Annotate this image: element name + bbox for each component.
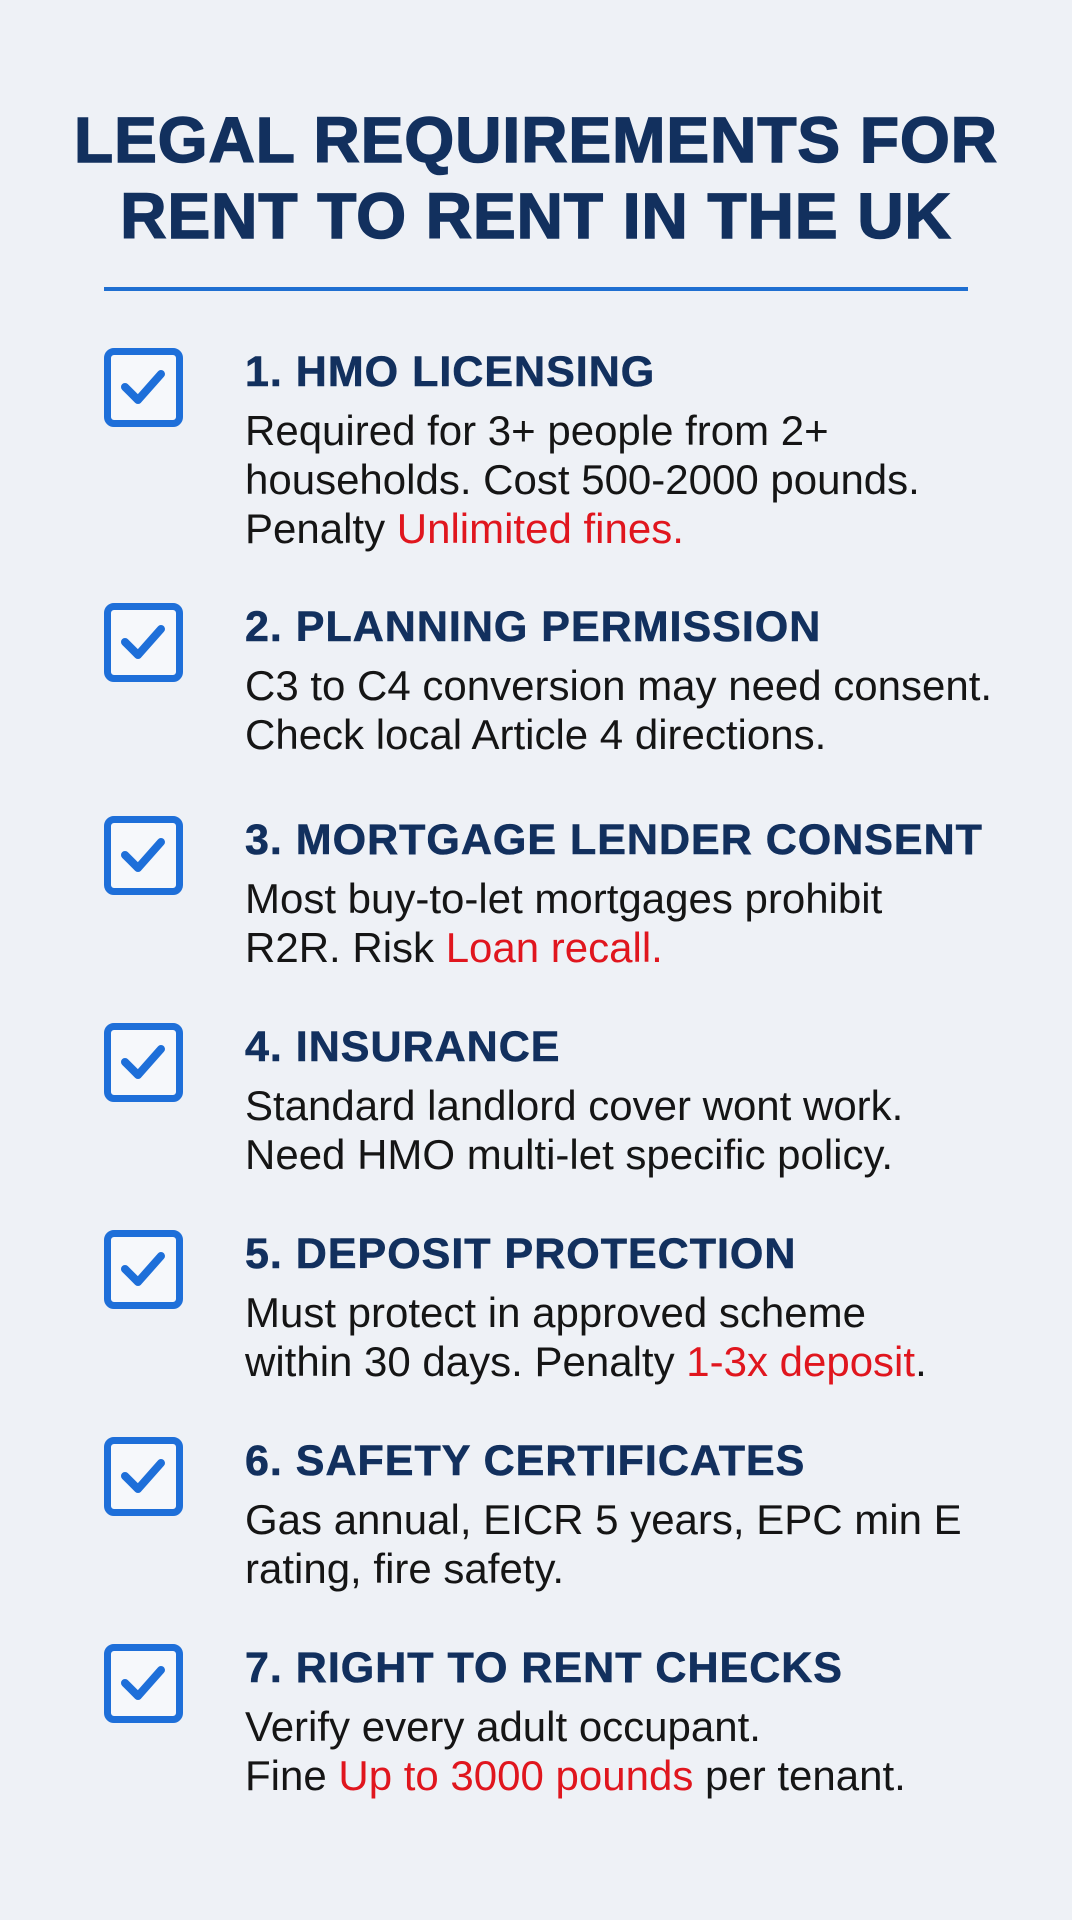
body text: C3 to C4 conversion may need consent.: [245, 662, 992, 709]
body text: Check local Article 4 directions.: [245, 711, 826, 758]
body text: [245, 407, 920, 552]
body text: Penalty Unlimited fines.: [245, 505, 684, 552]
icon: checkbox: [104, 1023, 183, 1102]
body text: rating, fire safety.: [245, 1545, 564, 1592]
icon: checkbox: [104, 1437, 183, 1516]
body text: [245, 1289, 927, 1385]
body text: Gas annual, EICR 5 years, EPC min E: [245, 1496, 962, 1543]
body text: Must protect in approved scheme: [245, 1289, 866, 1336]
heading: 7. RIGHT TO RENT CHECKS: [245, 1644, 843, 1692]
body text: Fine Up to 3000 pounds per tenant.: [245, 1752, 906, 1799]
heading: 4. INSURANCE: [245, 1023, 560, 1071]
body text: [245, 662, 992, 758]
heading: 5. DEPOSIT PROTECTION: [245, 1230, 796, 1278]
body text: [245, 1082, 903, 1178]
title: RENT TO RENT IN THE UK: [120, 180, 952, 252]
body text: Most buy-to-let mortgages prohibit: [245, 875, 882, 922]
body text: Required for 3+ people from 2+: [245, 407, 829, 454]
body text: Verify every adult occupant.: [245, 1703, 761, 1750]
heading: 2. PLANNING PERMISSION: [245, 603, 821, 651]
body text: within 30 days. Penalty 1-3x deposit.: [245, 1338, 927, 1385]
item 2: planning permission: [104, 603, 992, 758]
item 1: HMO licensing: [104, 348, 920, 552]
title: LEGAL REQUIREMENTS FOR: [74, 104, 998, 176]
item 6: safety certificates: [104, 1437, 962, 1592]
body text: Standard landlord cover wont work.: [245, 1082, 903, 1129]
heading: 3. MORTGAGE LENDER CONSENT: [245, 816, 983, 864]
heading: 1. HMO LICENSING: [245, 348, 655, 396]
item 5: deposit protection: [104, 1230, 927, 1385]
body text: [245, 1496, 962, 1592]
body text: households. Cost 500-2000 pounds.: [245, 456, 920, 503]
body text: Need HMO multi-let specific policy.: [245, 1131, 893, 1178]
item 7: right to rent checks: [104, 1644, 906, 1799]
icon: checkbox: [104, 603, 183, 682]
icon: checkbox: [104, 348, 183, 427]
icon: checkbox: [104, 1230, 183, 1309]
body text: R2R. Risk Loan recall.: [245, 924, 663, 971]
item 4: insurance: [104, 1023, 903, 1178]
icon: checkbox: [104, 1644, 183, 1723]
title: [74, 104, 998, 252]
heading: 6. SAFETY CERTIFICATES: [245, 1437, 805, 1485]
body text: [245, 875, 882, 971]
icon: checkbox: [104, 816, 183, 895]
body text: [245, 1703, 906, 1799]
item 3: mortgage lender consent: [104, 816, 983, 971]
